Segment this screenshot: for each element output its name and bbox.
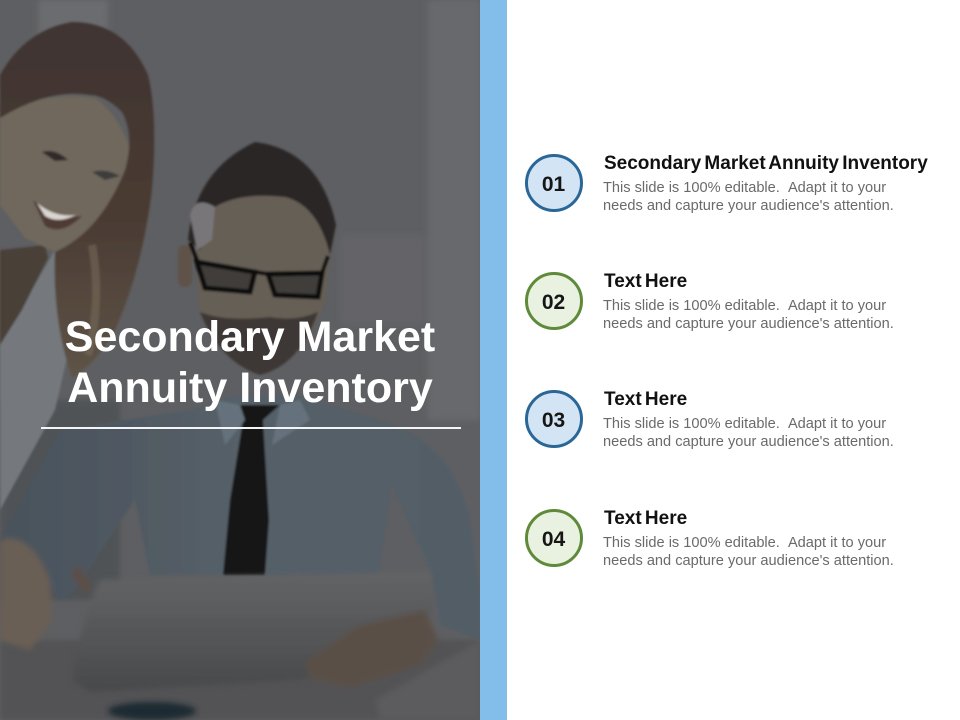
- woman: [0, 22, 154, 510]
- item 01 description: [603, 180, 894, 214]
- number badge 03: 03: [542, 409, 565, 432]
- item 02 text: [603, 271, 894, 332]
- item 03 description: needs and capture your audience's attention.: [603, 434, 894, 450]
- item 02 description: needs and capture your audience's attention.: [603, 316, 894, 332]
- number badge 01: 01: [542, 173, 565, 196]
- title: Secondary Market: [65, 313, 435, 361]
- item 03 description: [603, 416, 894, 450]
- number badge 03: [525, 390, 583, 448]
- number badge 01: [525, 154, 583, 212]
- item 04 description: This slide is 100% editable. Adapt it to your: [603, 535, 886, 551]
- number badge 02: 02: [542, 291, 565, 314]
- item 01 description: This slide is 100% editable. Adapt it to your: [603, 180, 886, 196]
- number badge 02: [525, 272, 583, 330]
- item 02 description: [603, 298, 894, 332]
- item 04 text: [603, 508, 894, 569]
- item 01 heading: Secondary Market Annuity Inventory: [604, 153, 928, 174]
- item 04 description: [603, 535, 894, 569]
- item 03 description: This slide is 100% editable. Adapt it to your: [603, 416, 886, 432]
- number badge 04: 04: [542, 528, 565, 551]
- man: [0, 142, 480, 640]
- item 04 description: needs and capture your audience's attention.: [603, 553, 894, 569]
- title underline: [41, 427, 461, 429]
- title: [65, 313, 435, 412]
- title: Annuity Inventory: [67, 364, 433, 412]
- item 01 description: needs and capture your audience's attention.: [603, 198, 894, 214]
- item 01 text: [603, 153, 928, 214]
- tablet and hands: [0, 538, 480, 720]
- item 04 heading: Text Here: [604, 508, 687, 529]
- photo: two colleagues looking at a tablet: [0, 0, 480, 720]
- item 03 text: [603, 389, 894, 450]
- item 03 heading: Text Here: [604, 389, 687, 410]
- number badge 04: [525, 509, 583, 567]
- blue vertical band: [480, 0, 507, 720]
- item 02 description: This slide is 100% editable. Adapt it to your: [603, 298, 886, 314]
- item 02 heading: Text Here: [604, 271, 687, 292]
